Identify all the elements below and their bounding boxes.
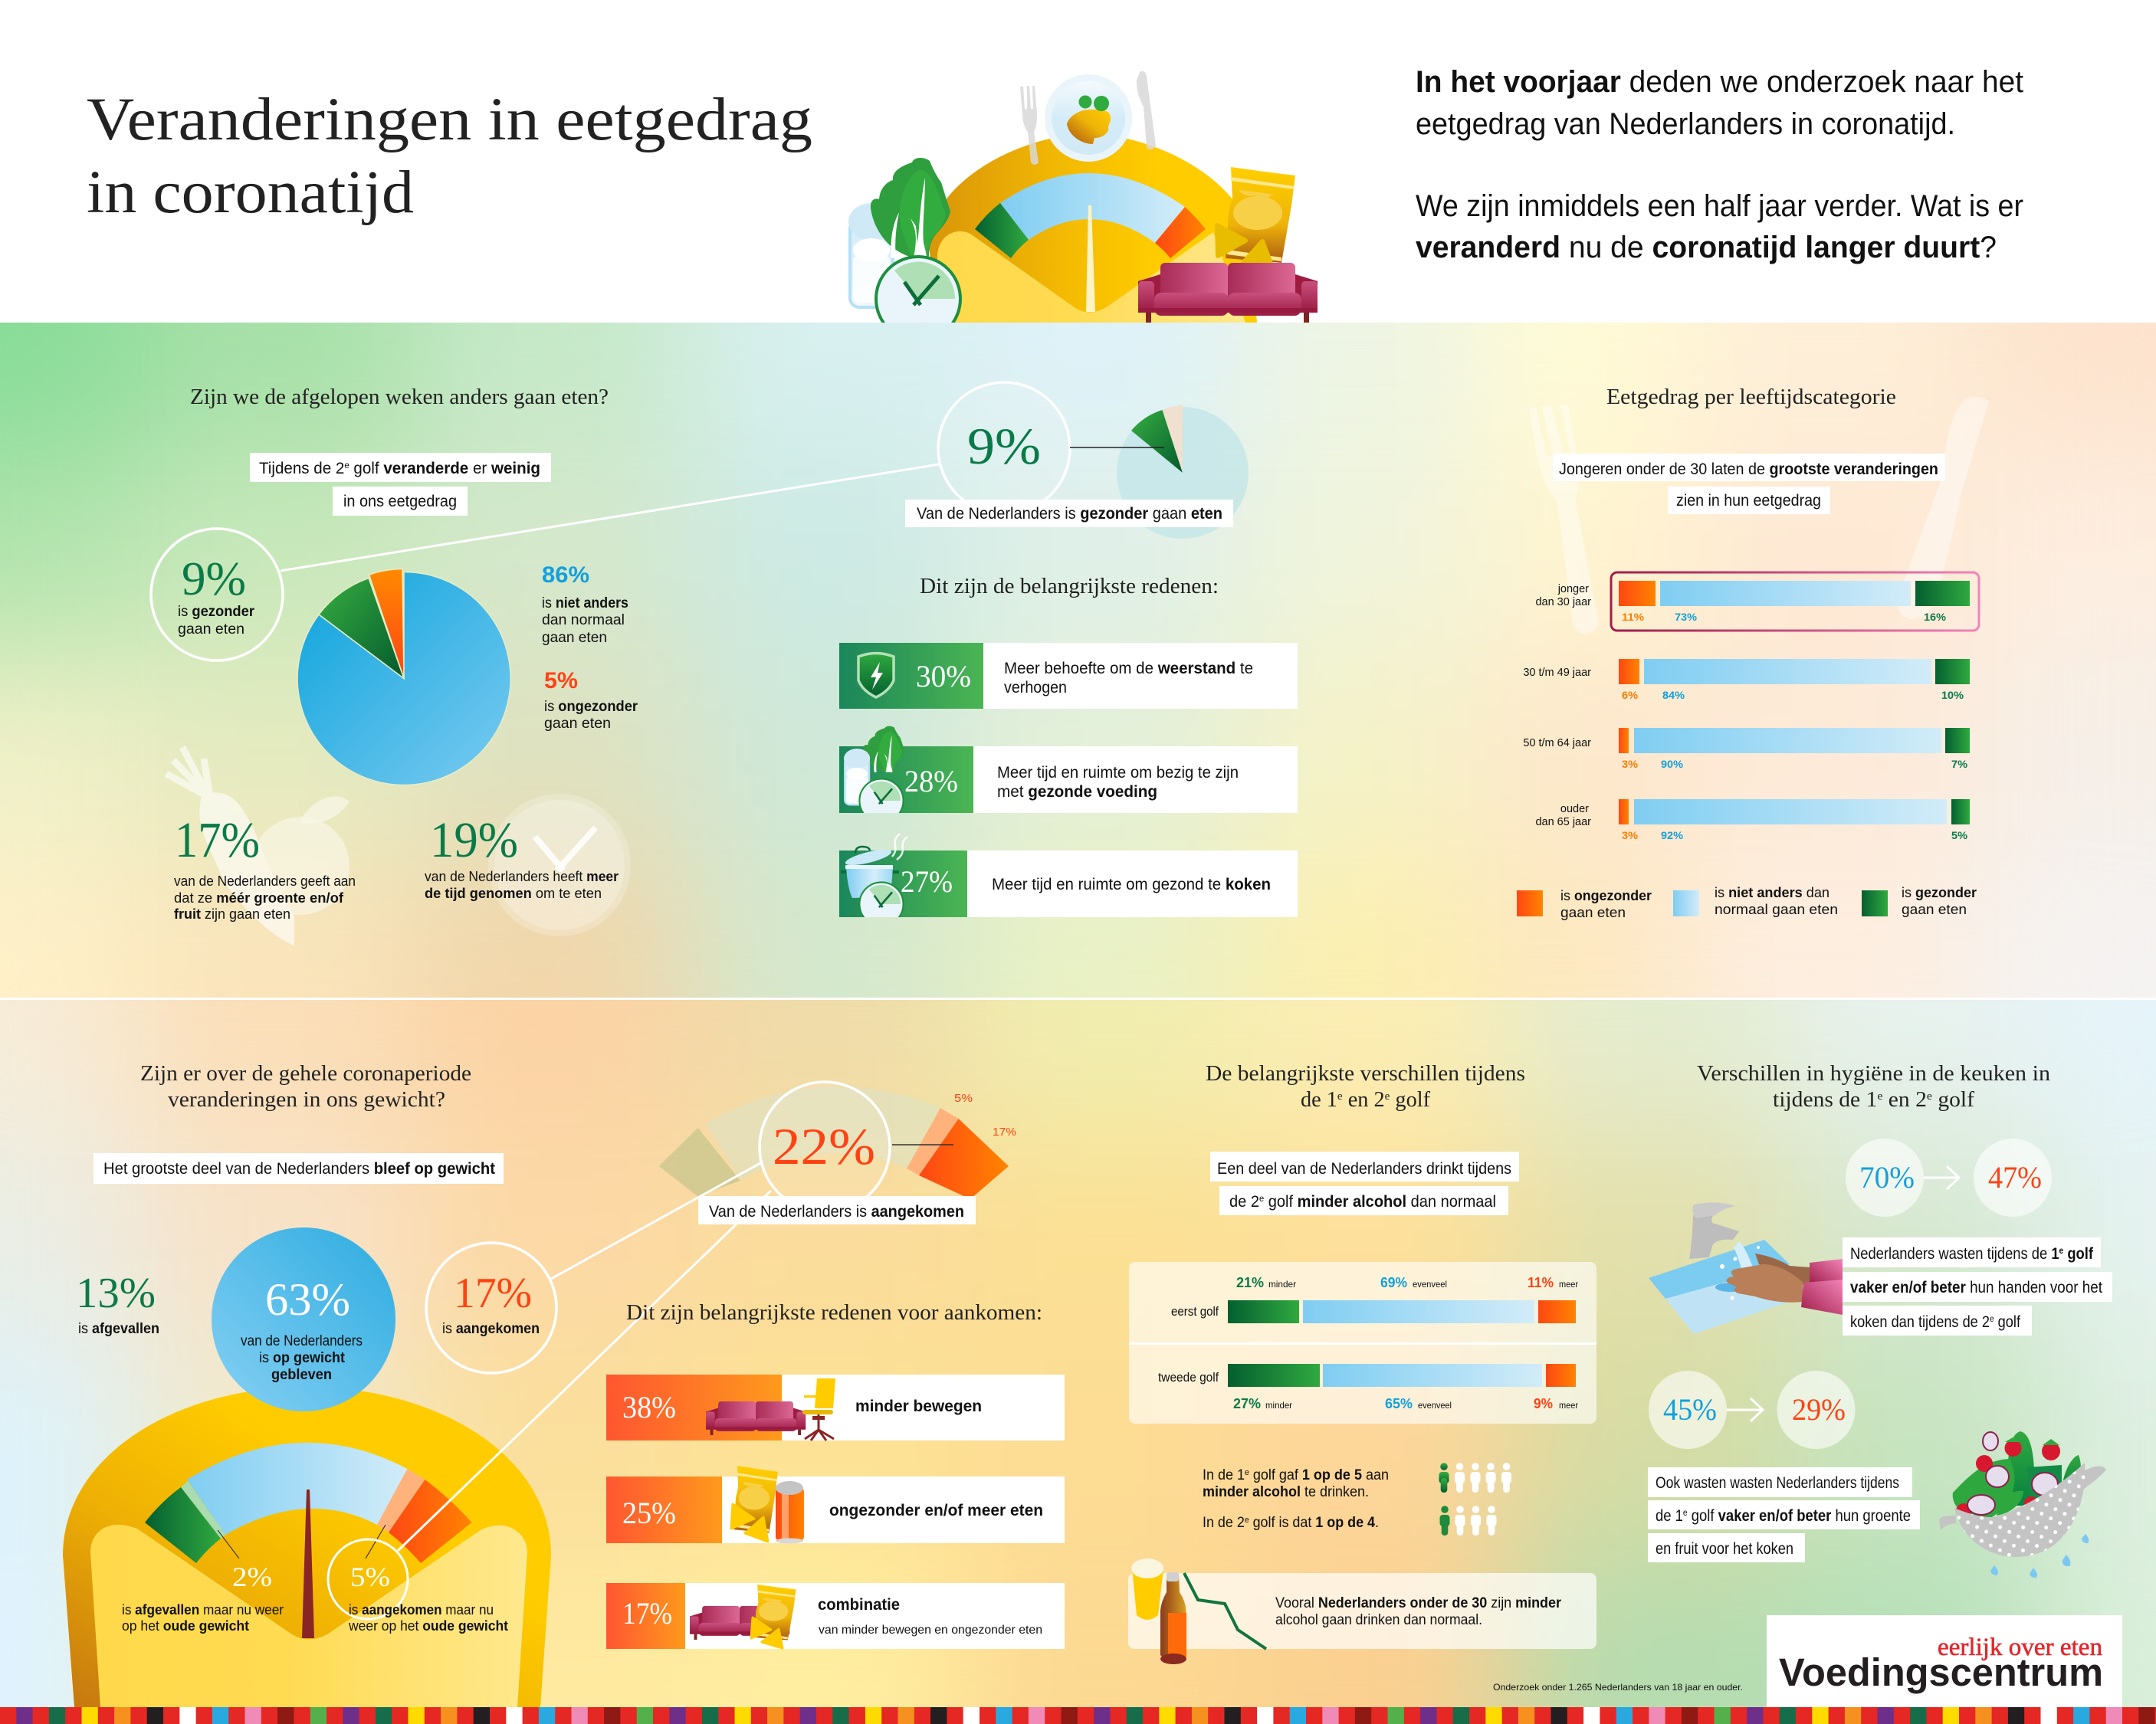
- stat 13%: 13%: [76, 1270, 156, 1317]
- panel: hygiene: [1648, 1062, 2112, 1578]
- connector lines: [398, 1163, 771, 1551]
- heading: en 2: [1343, 1088, 1385, 1112]
- stat 45 to 29: [1649, 1371, 1855, 1449]
- plate with food: [1045, 74, 1132, 162]
- text 1 op de 5: [1203, 1467, 1389, 1500]
- icon: chips bag: [754, 1585, 796, 1640]
- title: Veranderingen in eetgedrag: [87, 87, 812, 153]
- icon: sofa: [706, 1401, 806, 1435]
- bar: eerste golf: evenveel: [1413, 1279, 1447, 1290]
- legend 5%: [544, 668, 638, 732]
- bar: ouder dan 65: [1535, 799, 1970, 841]
- text 1 op de 5: minder alcohol te drinken.: [1203, 1484, 1369, 1500]
- bar: ouder dan 65: ouder: [1560, 803, 1589, 815]
- gauge wedge peach: [907, 1108, 959, 1175]
- stat circle 17%: 17%: [454, 1270, 532, 1317]
- icon: chips bag: [734, 1466, 778, 1532]
- bar: tweede golf: 27%: [1233, 1396, 1261, 1411]
- dial orange segment: [1155, 207, 1206, 258]
- text 1 op de 4: 1 op de 4.: [1315, 1515, 1379, 1531]
- legend 86%: dan normaal: [542, 611, 625, 628]
- bar: tweede golf: meer: [1559, 1400, 1578, 1411]
- callout: Van de Nederlanders is gezonder gaan eten: [917, 504, 1222, 523]
- legend: is ongezonder: [1560, 887, 1652, 903]
- faded pie: [1117, 405, 1249, 539]
- icon: beer glass: [1131, 1558, 1163, 1620]
- people 1 op de 4: [1439, 1506, 1496, 1536]
- bar: 30 t/m 49: [1523, 659, 1970, 701]
- stat 2%: 2%: [232, 1562, 272, 1592]
- icon: ghost knife: [1898, 397, 1989, 619]
- intro text: We zijn inmiddels een half jaar verder. Wat is er: [1416, 189, 2023, 223]
- bar: ouder dan 65: dan 65 jaar: [1535, 816, 1591, 828]
- callout line 2: [1668, 487, 1830, 514]
- stat circle 9%: [151, 529, 283, 660]
- callout line 1: Tijdens de 2: [259, 459, 348, 477]
- callout lines: [1843, 1237, 2112, 1336]
- callout line 1: [250, 453, 551, 482]
- bar: 30 t/m 49: 84%: [1662, 689, 1685, 701]
- callout line 2: [333, 487, 468, 516]
- reason row 17%: [606, 1583, 1065, 1649]
- stat 45 to 29: 29%: [1792, 1392, 1846, 1427]
- callout: [94, 1153, 504, 1184]
- reason row 28%: [839, 726, 1298, 823]
- pie chart: [297, 569, 510, 785]
- stat 17% groente: fruit zijn gaan eten: [174, 906, 290, 922]
- stat 17% groente: dat ze méér groente en/of: [174, 890, 344, 906]
- bar: eerste golf: eerst golf: [1171, 1305, 1219, 1319]
- bar: 50 t/m 64: 50 t/m 64 jaar: [1523, 737, 1591, 749]
- bar: tweede golf: minder: [1265, 1400, 1292, 1411]
- blue circle 63%: van de Nederlanders: [241, 1333, 363, 1349]
- gauge text left: op het oude gewicht: [122, 1617, 249, 1634]
- heading: Eetgedrag per leeftijdscategorie: [1606, 385, 1896, 409]
- callout lines: en fruit voor het koken: [1656, 1539, 1793, 1558]
- section background: eating: [0, 323, 2156, 998]
- reason row 17%: combinatie: [818, 1595, 900, 1614]
- note panel: [1128, 1558, 1596, 1664]
- callout line 2: minder alcohol dan normaal: [1298, 1192, 1503, 1211]
- legend 86%: is niet anders: [542, 595, 628, 611]
- heading: [140, 1062, 471, 1112]
- bar: 30 t/m 49: 6%: [1622, 689, 1639, 701]
- bottom colour stripe: [0, 1707, 2156, 1724]
- text 1 op de 4: In de 2: [1203, 1515, 1247, 1531]
- legend 86%: [542, 562, 628, 646]
- bar: eerste golf: 21%: [1236, 1275, 1264, 1290]
- callout line 1: e: [344, 460, 349, 470]
- weight gauge: [63, 1387, 551, 1707]
- icon: clock: [876, 257, 960, 341]
- bar: jonger dan 30: 16%: [1924, 611, 1947, 623]
- callout: Het grootste deel van de Nederlanders bleef op gewicht: [103, 1159, 495, 1178]
- legend 86%: gaan eten: [542, 629, 607, 646]
- knife: [1137, 71, 1156, 150]
- bar: jonger dan 30: [1535, 581, 1970, 623]
- blue circle 63%: [212, 1227, 395, 1411]
- blue circle 63%: is op gewicht: [259, 1350, 346, 1366]
- reason row 38%: 38%: [622, 1390, 676, 1424]
- callout line 1: Een deel van de Nederlanders drinkt tijdens: [1217, 1159, 1511, 1178]
- icon: soda can: [776, 1481, 804, 1543]
- callout: [905, 500, 1233, 527]
- gauge orange slice: [389, 1480, 472, 1563]
- gauge arch: [929, 134, 1257, 323]
- reason row 38%: minder bewegen: [855, 1397, 982, 1415]
- callout line 2: zien in hun eetgedrag: [1676, 491, 1821, 510]
- icon: chips bag: [1226, 167, 1295, 263]
- text 1 op de 4: e: [1245, 1516, 1249, 1525]
- heading: e: [1877, 1090, 1883, 1103]
- stat circle 9%: 9%: [967, 417, 1041, 475]
- heading: e: [1927, 1090, 1932, 1103]
- callout line 2: e: [1259, 1193, 1265, 1204]
- stat circle 17%: [426, 1243, 556, 1373]
- reason row 25%: ongezonder en/of meer eten: [829, 1501, 1043, 1519]
- icon: pot and clock: [841, 834, 907, 926]
- bar: jonger dan 30: jonger: [1557, 583, 1589, 595]
- stat 19% tijd: de tijd genomen om te eten: [425, 885, 602, 901]
- legend: normaal gaan eten: [1715, 901, 1838, 917]
- bar: 50 t/m 64: [1523, 728, 1970, 770]
- stat circle 9%: 9%: [182, 553, 246, 605]
- stat circle 22%: [760, 1082, 890, 1212]
- bar: 50 t/m 64: 3%: [1622, 758, 1639, 770]
- callout lines: vaker en/of beter hun groente: [1718, 1506, 1924, 1525]
- heading: Dit zijn belangrijkste redenen voor aankomen:: [626, 1301, 1042, 1325]
- icon: chips: [1217, 225, 1271, 263]
- stat 19% tijd: 19%: [430, 812, 518, 868]
- heading: e: [1337, 1090, 1343, 1103]
- callout lines: golf: [2063, 1244, 2094, 1263]
- legend 5%: 5%: [544, 668, 578, 693]
- callout line 1: veranderde er weinig: [383, 459, 543, 477]
- heading: Dit zijn de belangrijkste redenen:: [920, 575, 1219, 598]
- logo: eerlijk over eten: [1938, 1634, 2102, 1661]
- reason row 27%: Meer tijd en ruimte om gezond te koken: [992, 875, 1271, 893]
- legend: [1517, 884, 1977, 920]
- reason row 25%: 25%: [622, 1496, 676, 1530]
- needle: [302, 1490, 314, 1638]
- callout lines: e: [1990, 1313, 1994, 1324]
- bar: eerste golf: minder: [1268, 1279, 1296, 1290]
- callout lines: e: [1683, 1507, 1688, 1518]
- logo: Voedingscentrum: [1779, 1650, 2103, 1694]
- callout line 1: [1210, 1152, 1519, 1182]
- icon: glass of water: [848, 203, 894, 309]
- bar: ouder dan 65: 92%: [1661, 829, 1684, 841]
- legend 86%: 86%: [542, 562, 589, 588]
- reason row 27%: 27%: [901, 864, 953, 899]
- icon: bok choy: [871, 158, 950, 258]
- callout lines: golf: [1994, 1313, 2020, 1331]
- bar: ouder dan 65: 3%: [1622, 829, 1639, 841]
- intro text: In het voorjaar deden we onderzoek naar het: [1416, 65, 2023, 99]
- icon: sofa: [690, 1606, 789, 1640]
- icon: glass, bok choy and clock: [844, 726, 905, 823]
- heading: [1697, 1062, 2050, 1112]
- panel: gewicht: [63, 1062, 556, 1707]
- stat 17% groente: [174, 812, 356, 922]
- header illustration: gauge with food: [848, 71, 1318, 341]
- gauge arch: [63, 1387, 551, 1707]
- lower light panels: [937, 231, 1245, 323]
- bar: tweede golf: 9%: [1534, 1396, 1553, 1411]
- icon: ghost carrot and apple: [166, 747, 349, 946]
- text 1 op de 5: golf gaf: [1249, 1467, 1302, 1483]
- callout line 2: [1219, 1186, 1508, 1215]
- text 1 op de 5: In de 1: [1203, 1467, 1247, 1483]
- legend: gaan eten: [1560, 904, 1626, 920]
- callout lines: Nederlanders wasten tijdens de 1: [1850, 1244, 2081, 1263]
- callout lines: koken dan tijdens de 2: [1850, 1313, 2015, 1331]
- heading: Zijn we de afgelopen weken anders gaan eten?: [190, 385, 609, 409]
- reason row 27%: [839, 834, 1298, 926]
- icon: chips: [751, 1617, 783, 1648]
- source note: Onderzoek onder 1.265 Nederlanders van 18 jaar en ouder.: [1493, 1682, 1743, 1693]
- bar: tweede golf: tweede golf: [1158, 1371, 1219, 1385]
- highlight frame: [1611, 572, 1979, 631]
- panel: anders gaan eten: [151, 385, 939, 946]
- callout line 2: golf: [1264, 1192, 1298, 1211]
- gauge peach slice: [377, 1469, 425, 1532]
- heading: tijdens de 1: [1773, 1088, 1872, 1112]
- bar: 50 t/m 64: 7%: [1951, 758, 1968, 770]
- panel: leeftijdscategorie: [1517, 385, 1989, 920]
- declining line: [1184, 1573, 1266, 1649]
- icon: beer bottle: [1160, 1572, 1186, 1664]
- heading: en 2: [1882, 1088, 1927, 1112]
- label 17%: 17%: [993, 1126, 1016, 1139]
- callout line 1: Jongeren onder de 30 laten de grootste veranderingen: [1559, 460, 1938, 478]
- note panel: Vooral Nederlanders onder de 30 zijn minder: [1275, 1595, 1562, 1611]
- bar: eerste golf: 11%: [1528, 1275, 1554, 1290]
- callout lines: Ook wasten wasten Nederlanders tijdens: [1656, 1473, 1899, 1492]
- callout line 2: in ons eetgedrag: [343, 492, 457, 510]
- bar: tweede golf: 65%: [1385, 1396, 1413, 1411]
- reason row 30%: [839, 643, 1298, 709]
- stat circle 9%: is gezonder: [178, 603, 254, 620]
- bar: jonger dan 30: 73%: [1675, 611, 1698, 623]
- intro text: [1416, 65, 2023, 264]
- legend: is gezonder: [1902, 884, 1977, 900]
- text 1 op de 5: 1 op de 5 aan: [1302, 1467, 1390, 1483]
- stat circle 9%: gaan eten: [178, 621, 244, 637]
- stat 17% groente: 17%: [175, 812, 260, 868]
- stat 70 to 47: 70%: [1859, 1160, 1915, 1195]
- needle: [1086, 205, 1095, 312]
- section background: weight: [0, 1000, 2156, 1707]
- reason row 28%: met gezonde voeding: [997, 782, 1157, 801]
- gauge wedge orange: [919, 1119, 1009, 1199]
- heading: [1206, 1062, 1525, 1112]
- stat 17% groente: van de Nederlanders geeft aan: [174, 873, 356, 889]
- callout: Van de Nederlanders is aangekomen: [709, 1202, 964, 1221]
- bar: tweede golf: evenveel: [1418, 1400, 1452, 1411]
- callout line 1: golf: [349, 459, 383, 477]
- stat 13%: is afgevallen: [78, 1321, 159, 1337]
- gauge text left: [122, 1601, 284, 1634]
- stat 70 to 47: [1846, 1139, 2052, 1217]
- bar: 30 t/m 49: 30 t/m 49 jaar: [1523, 667, 1591, 679]
- gauge green slice: [145, 1487, 221, 1563]
- bar: 50 t/m 64: 90%: [1661, 758, 1684, 770]
- bar: eerste golf: 69%: [1380, 1275, 1407, 1290]
- stat 70 to 47: 47%: [1988, 1160, 2042, 1195]
- icon: shield: [858, 653, 894, 697]
- text 1 op de 4: golf is dat: [1249, 1515, 1315, 1531]
- icon: washing hands: [1649, 1202, 1843, 1334]
- fork: [1020, 86, 1039, 165]
- stat 5% circle: [328, 1539, 408, 1619]
- legend: gaan eten: [1902, 901, 1967, 917]
- callout lines: golf: [1688, 1506, 1718, 1525]
- stat 5% circle: 5%: [350, 1562, 390, 1592]
- intro text: veranderd nu de coronatijd langer duurt?: [1416, 231, 1997, 264]
- icon: colander with vegetables: [1939, 1431, 2106, 1578]
- logo: [1767, 1615, 2122, 1707]
- callout line 2: de 2: [1229, 1192, 1262, 1211]
- stat circle 9%: [938, 382, 1070, 514]
- heading: e: [1385, 1090, 1390, 1103]
- dial blue band: [1000, 173, 1185, 243]
- reason row 17%: van minder bewegen en ongezonder eten: [819, 1624, 1042, 1637]
- bar: 30 t/m 49: 10%: [1941, 689, 1964, 701]
- gauge text right: [348, 1601, 508, 1634]
- callout lines: [1648, 1467, 1920, 1562]
- bar: tweede golf: [1158, 1364, 1578, 1411]
- people 1 op de 5: [1439, 1463, 1511, 1493]
- gauge light green slice: [181, 1481, 225, 1539]
- stat 45 to 29: 45%: [1663, 1392, 1717, 1427]
- lower light panels: [90, 1525, 527, 1707]
- stat circle 22%: 22%: [773, 1117, 875, 1175]
- legend 5%: is ongezonder: [544, 698, 638, 715]
- bar: jonger dan 30: dan 30 jaar: [1535, 596, 1591, 608]
- heading: Zijn er over de gehele coronaperiode: [140, 1062, 471, 1086]
- bar: jonger dan 30: 11%: [1622, 611, 1645, 623]
- text 1 op de 5: e: [1245, 1468, 1249, 1477]
- legend 5%: gaan eten: [544, 715, 611, 732]
- bar: eerste golf: [1171, 1275, 1578, 1323]
- panel: aangekomen: [398, 1082, 1065, 1649]
- dial green segment: [975, 203, 1029, 258]
- heading: veranderingen in ons gewicht?: [168, 1088, 445, 1112]
- panel: gezonder gaan eten: [839, 382, 1298, 926]
- icon: ghost clock: [488, 794, 631, 936]
- icon: office chair: [802, 1378, 835, 1440]
- reason row 30%: Meer behoefte om de weerstand te: [1004, 659, 1253, 677]
- title: in coronatijd: [87, 159, 414, 226]
- reason row 30%: verhogen: [1004, 678, 1067, 696]
- heading: golf: [1932, 1088, 1975, 1112]
- icon: ghost fork: [1529, 405, 1599, 634]
- title: [87, 87, 812, 226]
- callout lines: de 1: [1656, 1506, 1688, 1525]
- heading: De belangrijkste verschillen tijdens: [1206, 1062, 1525, 1086]
- callout lines: e: [2059, 1245, 2064, 1256]
- callout line 1: [1553, 454, 1945, 481]
- label 5%: 5%: [954, 1092, 973, 1105]
- blue circle 63%: 63%: [265, 1274, 350, 1325]
- gauge blue band: [187, 1443, 408, 1535]
- stat 13%: [76, 1270, 159, 1337]
- reason row 17%: 17%: [622, 1596, 672, 1631]
- stat 19% tijd: van de Nederlanders heeft meer: [425, 868, 619, 884]
- intro text: eetgedrag van Nederlanders in coronatijd.: [1416, 107, 1955, 141]
- icon: chips: [731, 1504, 768, 1542]
- heading: de 1: [1301, 1088, 1337, 1112]
- connector line: [281, 464, 939, 571]
- stat circle 17%: is aangekomen: [442, 1321, 540, 1337]
- stat 19% tijd: [425, 812, 619, 901]
- reason row 28%: Meer tijd en ruimte om bezig te zijn: [997, 763, 1239, 782]
- heading: golf: [1390, 1088, 1431, 1112]
- panel: alcohol: [1128, 1062, 1596, 1664]
- bar: eerste golf: meer: [1559, 1279, 1578, 1290]
- legend: is niet anders dan: [1715, 884, 1829, 900]
- heading: Verschillen in hygiëne in de keuken in: [1697, 1062, 2050, 1086]
- reason row 28%: 28%: [904, 764, 958, 798]
- icon: sofa: [1138, 263, 1318, 323]
- gauge text right: weer op het oude gewicht: [348, 1617, 508, 1634]
- reason row 25%: [606, 1466, 1065, 1543]
- callout lines: vaker en/of beter hun handen voor het: [1850, 1278, 2102, 1296]
- bar: ouder dan 65: 5%: [1951, 829, 1968, 841]
- gauge text right: is aangekomen maar nu: [349, 1601, 494, 1617]
- bar chart panel: [1129, 1262, 1596, 1424]
- blue circle 63%: gebleven: [271, 1367, 332, 1383]
- callout: [698, 1196, 976, 1224]
- reason row 30%: 30%: [916, 659, 971, 693]
- gauge text left: is afgevallen maar nu weer: [122, 1601, 284, 1617]
- note panel: alcohol gaan drinken dan normaal.: [1275, 1612, 1482, 1628]
- reason row 38%: [606, 1375, 1065, 1440]
- faded gauge: [659, 1087, 941, 1196]
